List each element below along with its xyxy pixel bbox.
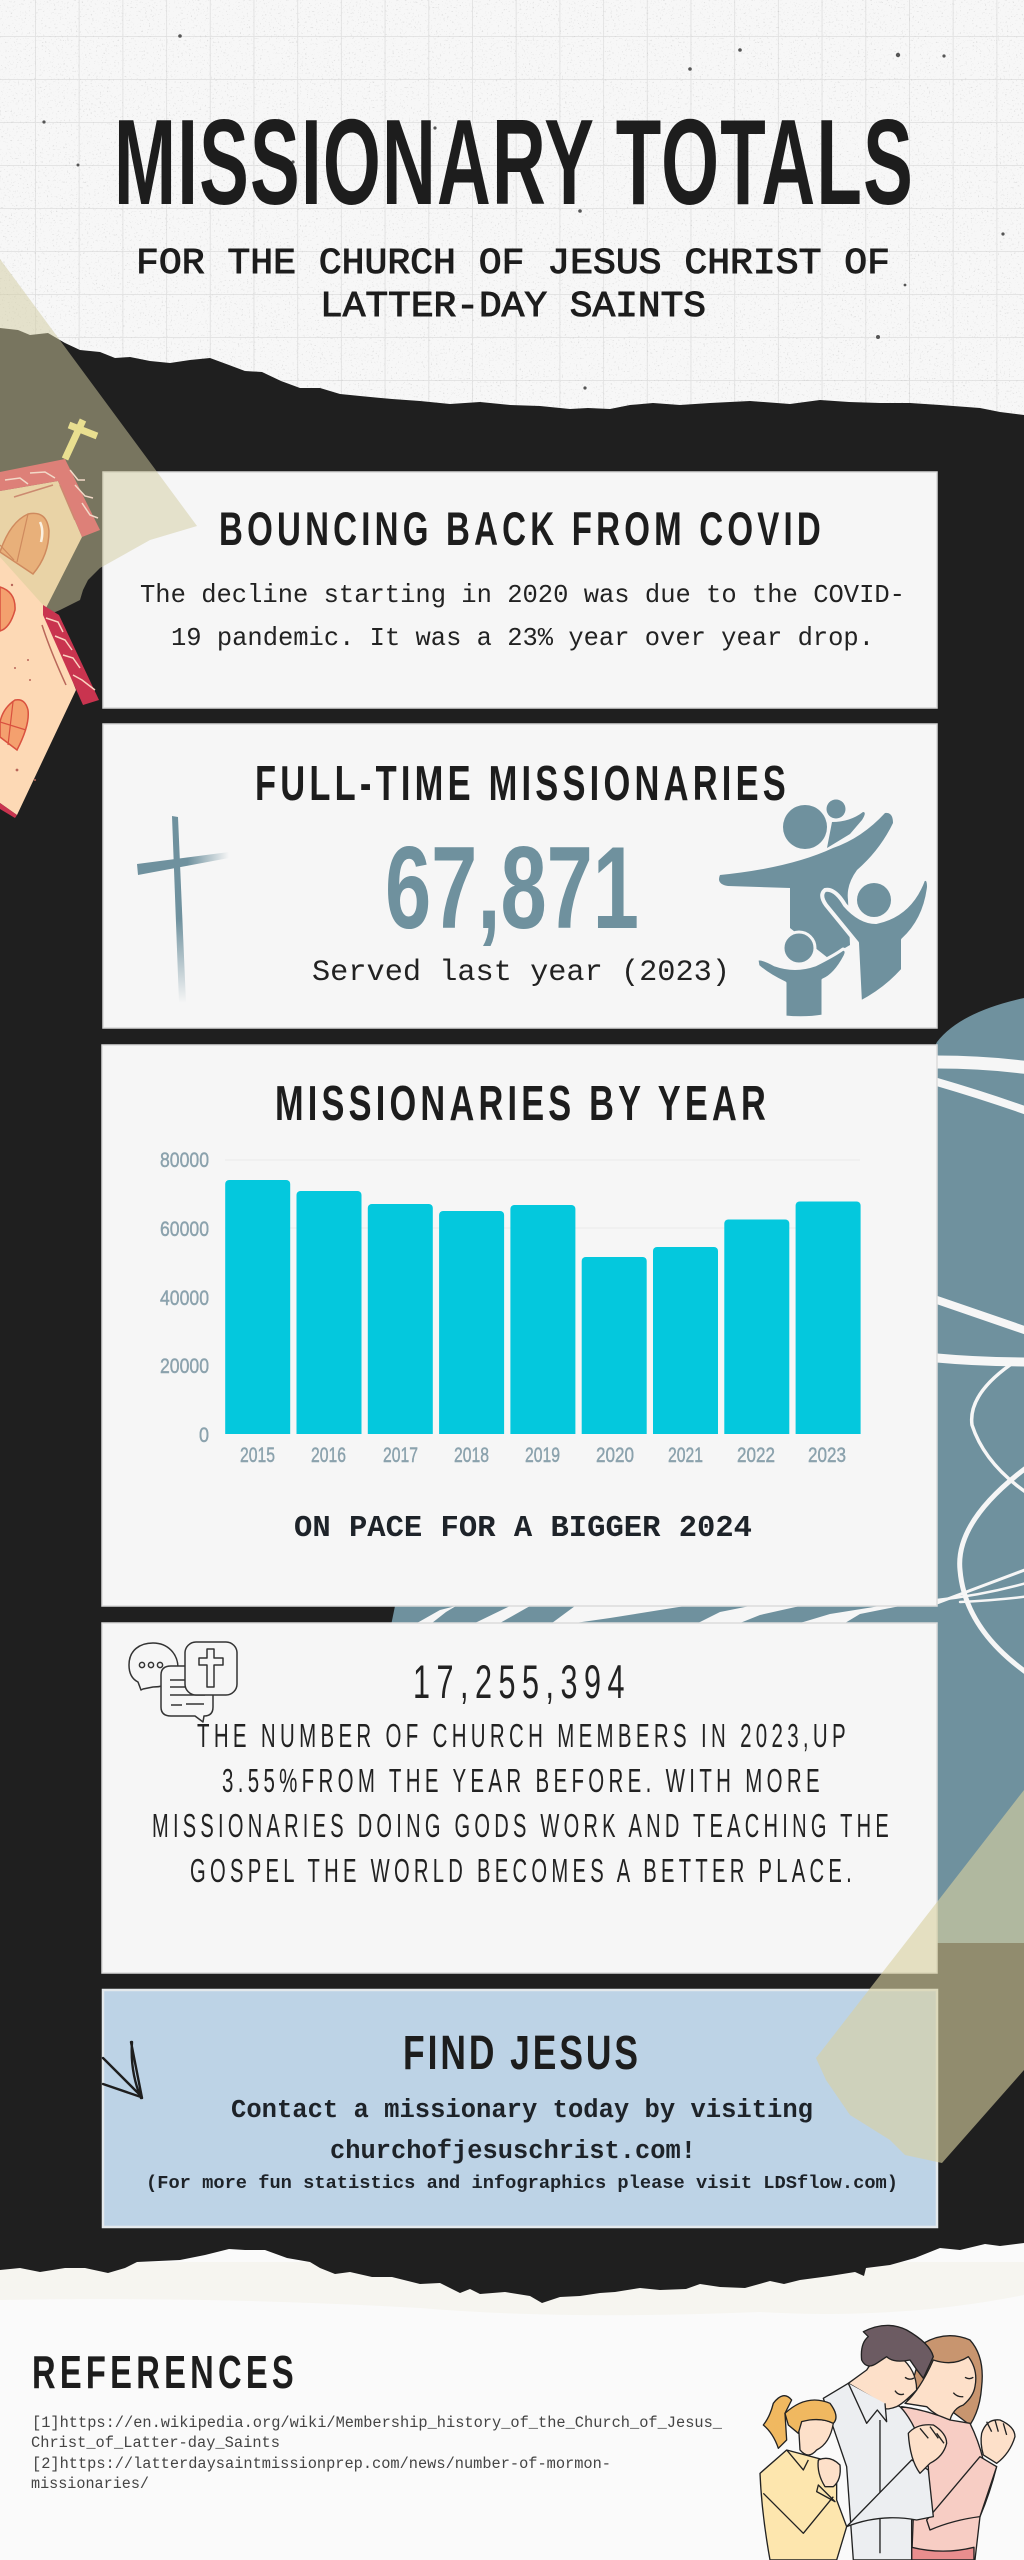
heading: FULL-TIME MISSIONARIES	[255, 757, 790, 811]
x axis labels: 2018	[454, 1444, 489, 1467]
body text	[140, 580, 905, 653]
y axis labels: 0	[199, 1424, 209, 1447]
background: bottom paper	[0, 2230, 1024, 2560]
y axis labels: 20000	[160, 1355, 209, 1378]
background: grid paper top	[0, 0, 1024, 440]
decorative teal brush shape	[388, 998, 1024, 1943]
body text: 19 pandemic. It was a 23% year over year drop.	[171, 623, 874, 653]
x axis labels: 2017	[383, 1444, 418, 1467]
icon: brushed cross	[137, 816, 229, 1003]
background: black torn paper band	[0, 328, 1024, 2303]
reference links: missionaries/	[31, 2475, 149, 2493]
white brush strokes	[937, 1062, 1024, 1675]
y axis labels: 60000	[160, 1218, 209, 1241]
references section	[31, 2346, 723, 2493]
church upper section	[0, 459, 100, 610]
x axis labels: 2015	[240, 1444, 275, 1467]
heading: REFERENCES	[32, 2346, 298, 2398]
icon: people celebrating	[719, 800, 929, 1018]
bar chart	[160, 1149, 861, 1467]
reference links: [2]https://latterdaysaintmissionprep.com/news/number-of-mormon-	[32, 2455, 611, 2473]
y axis labels: 80000	[160, 1149, 209, 1172]
woman	[902, 2336, 1015, 2560]
bars	[225, 1180, 861, 1434]
subtitle: FOR THE CHURCH OF JESUS CHRIST OF	[136, 243, 890, 284]
illustration: family praying	[760, 2325, 1015, 2560]
reference links: [1]https://en.wikipedia.org/wiki/Membership_history_of_the_Church_of_Jesus_	[32, 2414, 723, 2432]
x axis labels: 2019	[525, 1444, 560, 1467]
x axis labels: 2016	[311, 1444, 346, 1467]
y axis labels	[160, 1149, 209, 1447]
girl	[760, 2396, 847, 2560]
panel: church members	[102, 1623, 937, 1973]
subtitle	[136, 243, 890, 327]
chart caption: ON PACE FOR A BIGGER 2024	[294, 1511, 752, 1546]
call to action text: churchofjesuschrist.com!	[330, 2137, 696, 2166]
big number: 67,871	[385, 822, 639, 953]
decorative tape: bottom right	[816, 1790, 1024, 2163]
x axis labels: 2020	[596, 1444, 634, 1467]
x axis labels: 2023	[808, 1444, 846, 1467]
x axis labels	[240, 1444, 846, 1467]
man	[823, 2325, 947, 2560]
illustration: church	[0, 420, 100, 818]
panel: missionaries by year	[102, 1045, 937, 1606]
x axis labels: 2021	[668, 1444, 703, 1467]
church lower section	[0, 557, 99, 818]
heading: FIND JESUS	[403, 2027, 641, 2080]
body text	[152, 1717, 893, 1889]
call to action text	[146, 2096, 898, 2194]
reference links: Christ_of_Latter-day_Saints	[31, 2434, 280, 2452]
reference links	[31, 2414, 723, 2493]
icon: scribbled arrow	[103, 2042, 142, 2098]
call to action text: (For more fun statistics and infographics please visit LDSflow.com)	[146, 2172, 898, 2194]
church cross	[65, 420, 97, 459]
member count: 17,255,394	[413, 1655, 631, 1708]
decorative tape: top left	[0, 259, 197, 613]
heading: MISSIONARIES BY YEAR	[275, 1077, 770, 1131]
body text: The decline starting in 2020 was due to the COVID-	[140, 580, 905, 610]
icon: speech bubbles with cross	[129, 1642, 237, 1722]
panel: full-time missionaries	[103, 724, 937, 1028]
caption: Served last year (2023)	[312, 956, 730, 990]
y axis labels: 40000	[160, 1287, 209, 1310]
x axis labels: 2022	[737, 1444, 775, 1467]
white stripes between panels	[417, 1606, 900, 1623]
panel: bouncing back from covid	[103, 472, 937, 708]
subtitle: LATTER-DAY SAINTS	[320, 286, 706, 327]
panel: find jesus	[103, 1990, 937, 2227]
call to action text: Contact a missionary today by visiting	[231, 2096, 813, 2125]
